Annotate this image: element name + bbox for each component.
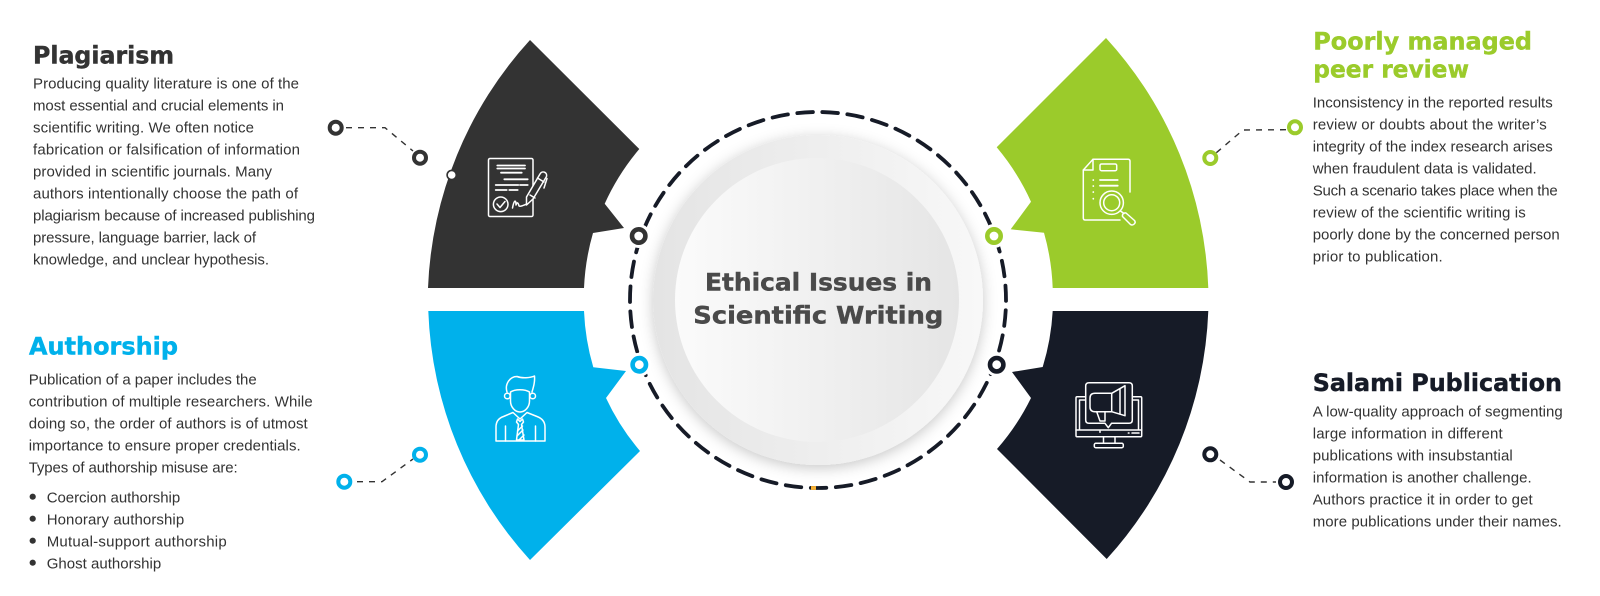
marker: salami orbit dot — [985, 353, 1009, 377]
body: authorship: Types of authorship misuse are: — [29, 459, 238, 476]
body: plagiarism: scientific writing. We often notice — [33, 119, 254, 136]
body: plagiarism: knowledge, and unclear hypothesis. — [33, 251, 269, 268]
body: poorly managed peer review: poorly done by the concerned person — [1313, 227, 1560, 244]
body: poorly managed peer review: prior to publication. — [1313, 249, 1443, 266]
heading: poorly managed peer review: Poorly managed — [1313, 27, 1532, 55]
marker: plagiarism orbit dot — [627, 224, 651, 248]
body: plagiarism: pressure, language barrier, lack of — [33, 229, 257, 246]
body: salami publication: publications with insubstantial — [1313, 448, 1513, 465]
body: plagiarism: most essential and crucial elements in — [33, 97, 284, 114]
text block: salami publication — [1313, 369, 1563, 531]
body: plagiarism — [33, 75, 315, 268]
body: poorly managed peer review: Such a scenario takes place when the — [1313, 183, 1558, 200]
list: authorship misuse types: Honorary authorship — [47, 511, 184, 528]
heading: poorly managed peer review — [1313, 27, 1532, 84]
title — [693, 268, 943, 329]
text block: poorly managed peer review — [1312, 27, 1560, 266]
body: salami publication: more publications under their names. — [1313, 514, 1562, 531]
text block: authorship — [29, 332, 313, 572]
body: poorly managed peer review: when fraudulent data is validated. — [1312, 161, 1537, 178]
marker: edge dot on plagiarism segment — [447, 170, 456, 180]
title: Scientific Writing — [693, 301, 943, 329]
body: salami publication — [1313, 404, 1563, 531]
body: poorly managed peer review: Inconsistency in the reported results — [1313, 95, 1553, 112]
text block: plagiarism — [33, 41, 315, 268]
list: authorship misuse types — [30, 489, 227, 572]
body: poorly managed peer review — [1312, 95, 1560, 266]
body: authorship — [29, 371, 313, 476]
body: plagiarism: Producing quality literature is one of the — [33, 75, 299, 92]
body: salami publication: Authors practice it in order to get — [1313, 492, 1534, 509]
dashed orbit ring — [630, 112, 1006, 488]
heading: salami publication: Salami Publication — [1313, 369, 1562, 397]
body: poorly managed peer review: review or doubts about the writer’s — [1313, 117, 1547, 134]
body: plagiarism: provided in scientific journals. Many — [33, 163, 272, 180]
body: salami publication: A low-quality approach of segmenting — [1313, 404, 1563, 421]
body: poorly managed peer review: review of the scientific writing is — [1313, 205, 1526, 222]
list: authorship misuse types: Ghost authorship — [47, 555, 161, 572]
body: poorly managed peer review: integrity of the index research arises — [1313, 139, 1553, 156]
connector: authorship — [338, 449, 426, 488]
marker: peer review orbit dot — [982, 224, 1006, 248]
body: authorship: Publication of a paper includes the — [29, 371, 257, 388]
icon: document with magnifier — [1083, 159, 1135, 225]
body: salami publication: large information in different — [1313, 426, 1504, 443]
body: authorship: contribution of multiple researchers. While — [29, 393, 313, 410]
body: plagiarism: plagiarism because of increased publishing — [33, 207, 315, 224]
connector: peer review — [1204, 121, 1301, 164]
list: authorship misuse types: Mutual-support authorship — [47, 533, 227, 550]
marker: authorship orbit dot — [627, 353, 651, 377]
panel: poorly managed peer review segment — [997, 38, 1208, 288]
connector: salami — [1204, 448, 1292, 488]
body: salami publication: information is another challenge. — [1313, 470, 1532, 487]
heading: poorly managed peer review: peer review — [1313, 56, 1469, 84]
list: authorship misuse types: Coercion authorship — [47, 489, 180, 506]
body: authorship: importance to ensure proper credentials. — [29, 437, 301, 454]
icon: signed document with pen — [488, 158, 547, 216]
connector: plagiarism — [330, 122, 426, 164]
panel: authorship segment — [428, 311, 640, 560]
icon: monitor with megaphone — [1076, 383, 1142, 448]
title: Ethical Issues in — [705, 268, 932, 296]
panel: plagiarism segment — [428, 40, 639, 288]
body: plagiarism: authors intentionally choose the path of — [33, 185, 299, 202]
body: plagiarism: fabrication or falsification of information — [33, 141, 300, 158]
body: authorship: doing so, the order of authors is of utmost — [29, 415, 309, 432]
heading: authorship: Authorship — [29, 332, 178, 360]
panel: salami publication segment — [997, 311, 1208, 559]
heading: plagiarism: Plagiarism — [33, 41, 174, 69]
central circle — [653, 135, 983, 465]
icon: person with tie — [496, 376, 545, 441]
